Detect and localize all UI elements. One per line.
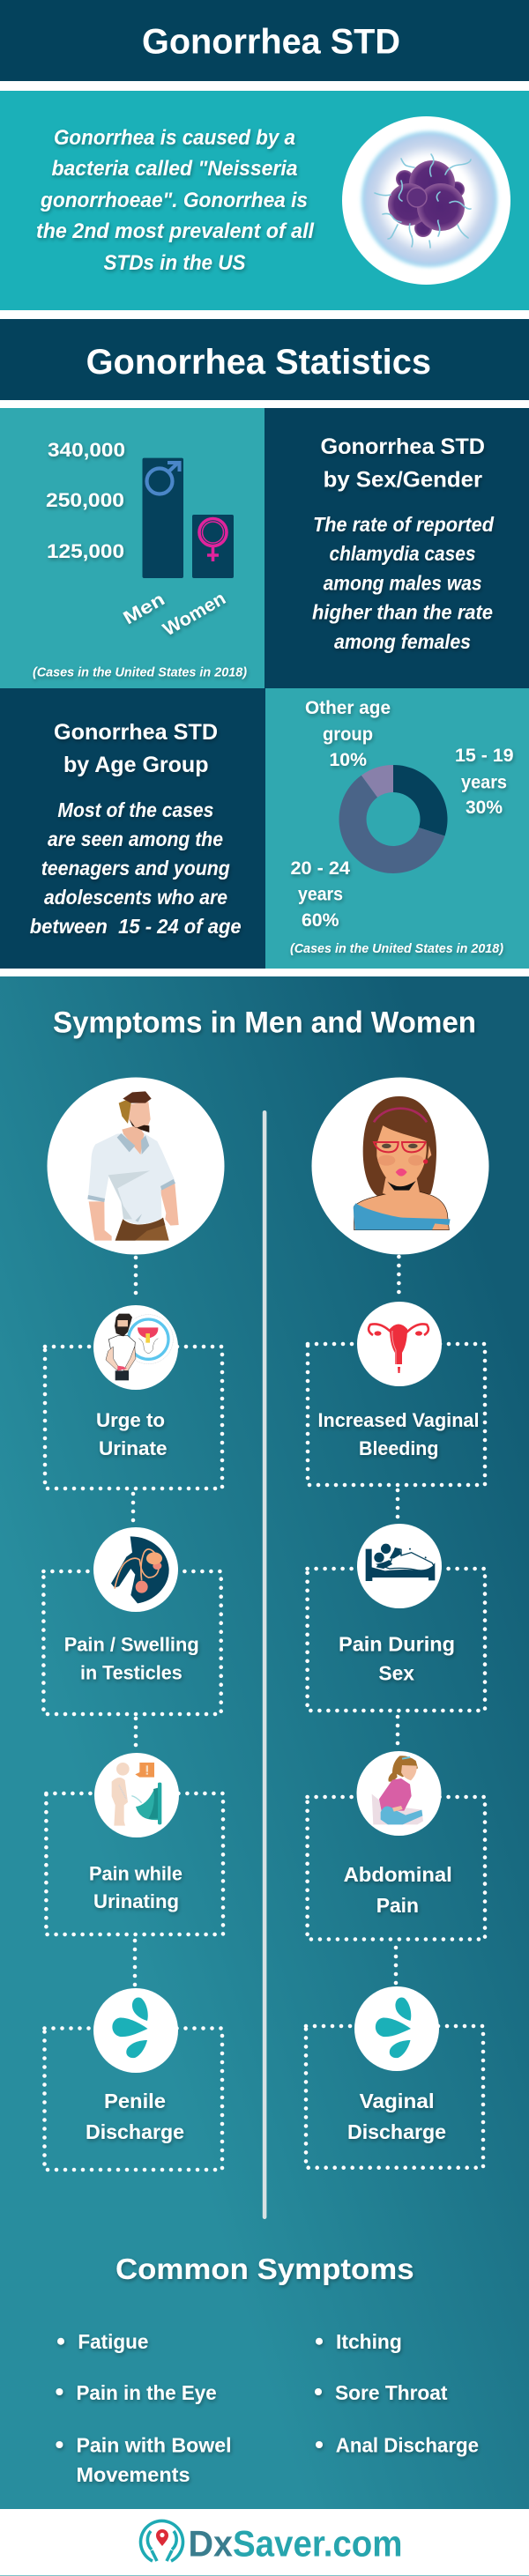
label: Sex <box>378 1662 414 1685</box>
card: urge to urinate <box>45 1305 222 1488</box>
text block: introduction: bacteria called "Neisseria <box>51 157 298 181</box>
bar chart: cases by sex <box>46 439 234 640</box>
label: 15-19 years: 30% <box>466 798 503 818</box>
panel: by sex and gender <box>264 408 529 688</box>
label <box>339 1632 455 1685</box>
text block: by age <box>30 798 242 938</box>
heading: by age: Gonorrhea STD <box>54 720 218 745</box>
bar chart: cases by sex: 125,000 <box>47 540 124 562</box>
text block: by sex: among males was <box>324 572 482 595</box>
icon: logo location pin <box>141 2520 183 2561</box>
label: Discharge <box>86 2120 184 2143</box>
caption: source: (Cases in the United States in 2018) <box>290 941 503 956</box>
list: common symptoms right <box>315 2330 479 2457</box>
label: Vaginal <box>360 2090 435 2112</box>
label: 15-19 years <box>455 746 513 818</box>
donut chart: cases by age <box>339 765 448 873</box>
label: other age group <box>305 698 391 770</box>
label: Urinating <box>93 1890 179 1912</box>
label <box>317 1409 480 1459</box>
bar chart: cases by sex: Men <box>120 589 168 628</box>
panel: introduction <box>0 91 529 310</box>
text block: by age: adolescents who are <box>44 886 227 909</box>
logo wordmark: Saver.com <box>233 2523 402 2565</box>
list: common symptoms left <box>56 2330 232 2486</box>
heading: Symptoms in Men and Women: Symptoms in Men and Women <box>53 1006 476 1040</box>
label: Pain / Swelling <box>64 1634 199 1655</box>
heading: by age <box>54 720 218 777</box>
text block: introduction: gonorrhoeae". Gonorrhea is <box>40 189 308 212</box>
icon: drops <box>376 1997 411 2058</box>
icon: male symbol <box>146 463 180 494</box>
divider <box>263 1110 266 2219</box>
card: pain during sex <box>308 1524 485 1711</box>
list: common symptoms left: Fatigue <box>78 2330 148 2353</box>
panel: symptoms <box>0 976 529 2509</box>
title: Gonorrhea STD <box>142 23 400 62</box>
label: 20-24 years: years <box>298 885 343 905</box>
heading: by sex <box>321 434 485 492</box>
list: common symptoms right: Itching <box>336 2330 402 2353</box>
bar chart: cases by sex: 340,000 <box>48 439 125 461</box>
text block: by age: are seen among the <box>48 828 223 850</box>
icon: gonorrhea bacteria <box>342 116 510 285</box>
card: abdominal pain <box>308 1751 485 1939</box>
label <box>347 2090 446 2143</box>
text block: introduction: the 2nd most prevalent of all <box>36 219 315 243</box>
text block: by sex: The rate of reported <box>313 513 495 536</box>
figure: man <box>48 1077 224 1255</box>
text block: by age: teenagers and young <box>41 857 230 880</box>
list: common symptoms right: Sore Throat <box>335 2381 448 2404</box>
panel: statistics banner <box>0 319 529 400</box>
label: other age group: 10% <box>330 750 367 770</box>
text block: by sex: higher than the rate <box>312 601 493 624</box>
label: Penile <box>104 2090 166 2112</box>
connector: women column <box>396 1257 399 1984</box>
text block: by sex: chlamydia cases <box>330 542 476 565</box>
text block: by sex: among females <box>334 630 471 653</box>
icon: testicle anatomy <box>111 1536 169 1603</box>
label: Pain During <box>339 1632 455 1655</box>
heading: Gonorrhea Statistics: Gonorrhea Statistics <box>86 343 431 382</box>
connector: men column <box>133 1258 136 1986</box>
label: other age group: group <box>323 724 373 745</box>
card: penile discharge <box>44 1988 222 2170</box>
heading: by sex: by Sex/Gender <box>324 467 482 492</box>
label: Urinate <box>99 1437 168 1459</box>
icon: couple in bed <box>366 1544 435 1581</box>
icon: man with prostate <box>106 1314 173 1380</box>
icon: woman holding abdomen <box>372 1756 423 1824</box>
icon: uterus <box>369 1324 428 1373</box>
figure: woman <box>312 1077 488 1255</box>
panel: age chart <box>265 688 529 969</box>
list: common symptoms left: Movements <box>76 2463 190 2486</box>
label: in Testicles <box>80 1662 183 1684</box>
caption: source: (Cases in the United States in 2018) <box>33 664 247 680</box>
label: 20-24 years: 60% <box>302 910 339 931</box>
text block: introduction: STDs in the US <box>104 251 245 275</box>
card: pain or swelling in testicles <box>43 1527 221 1714</box>
label <box>96 1409 168 1459</box>
heading: by age: by Age Group <box>63 753 208 777</box>
panel: by age group <box>0 688 265 969</box>
label <box>64 1634 199 1684</box>
label: 20-24 years <box>291 858 350 931</box>
card: increased vaginal bleeding <box>308 1302 485 1485</box>
list: common symptoms left: Pain in the Eye <box>76 2381 217 2404</box>
card: vaginal discharge <box>306 1986 483 2168</box>
heading: Common Symptoms: Common Symptoms <box>115 2253 414 2285</box>
card: pain while urinating <box>46 1753 223 1934</box>
label: 15-19 years: 15 - 19 <box>455 746 513 766</box>
label <box>86 2090 184 2143</box>
heading: by sex: Gonorrhea STD <box>321 434 485 459</box>
list: common symptoms right: Anal Discharge <box>336 2434 479 2457</box>
text block: introduction: Gonorrhea is caused by a <box>54 126 295 150</box>
label <box>89 1863 183 1912</box>
icon: female symbol <box>199 518 227 561</box>
label: Abdominal <box>344 1863 452 1886</box>
label: other age group: Other age <box>305 698 391 718</box>
label: Discharge <box>347 2120 446 2143</box>
label: Bleeding <box>359 1437 439 1459</box>
text block: by age: Most of the cases <box>57 798 213 821</box>
label: Pain <box>376 1894 419 1917</box>
text block: introduction <box>36 126 315 275</box>
bar chart: cases by sex: Women <box>160 588 229 640</box>
logo wordmark: Dx <box>189 2523 234 2565</box>
label: 15-19 years: years <box>461 773 507 793</box>
label: Increased Vaginal <box>317 1409 480 1431</box>
label: 20-24 years: 20 - 24 <box>291 858 350 879</box>
panel: title banner <box>0 0 529 81</box>
footer: logo <box>0 2509 529 2576</box>
label: Pain while <box>89 1863 183 1885</box>
icon: drops <box>112 1997 148 2058</box>
label <box>344 1863 452 1917</box>
icon: man at urinal <box>112 1763 161 1826</box>
text block: by age: between 15 - 24 of age <box>30 915 242 938</box>
text block: by sex <box>312 513 495 653</box>
list: common symptoms left: Pain with Bowel <box>76 2434 231 2457</box>
panel: sex chart <box>0 408 264 688</box>
bar chart: cases by sex: 250,000 <box>46 489 124 511</box>
label: Urge to <box>96 1409 165 1431</box>
